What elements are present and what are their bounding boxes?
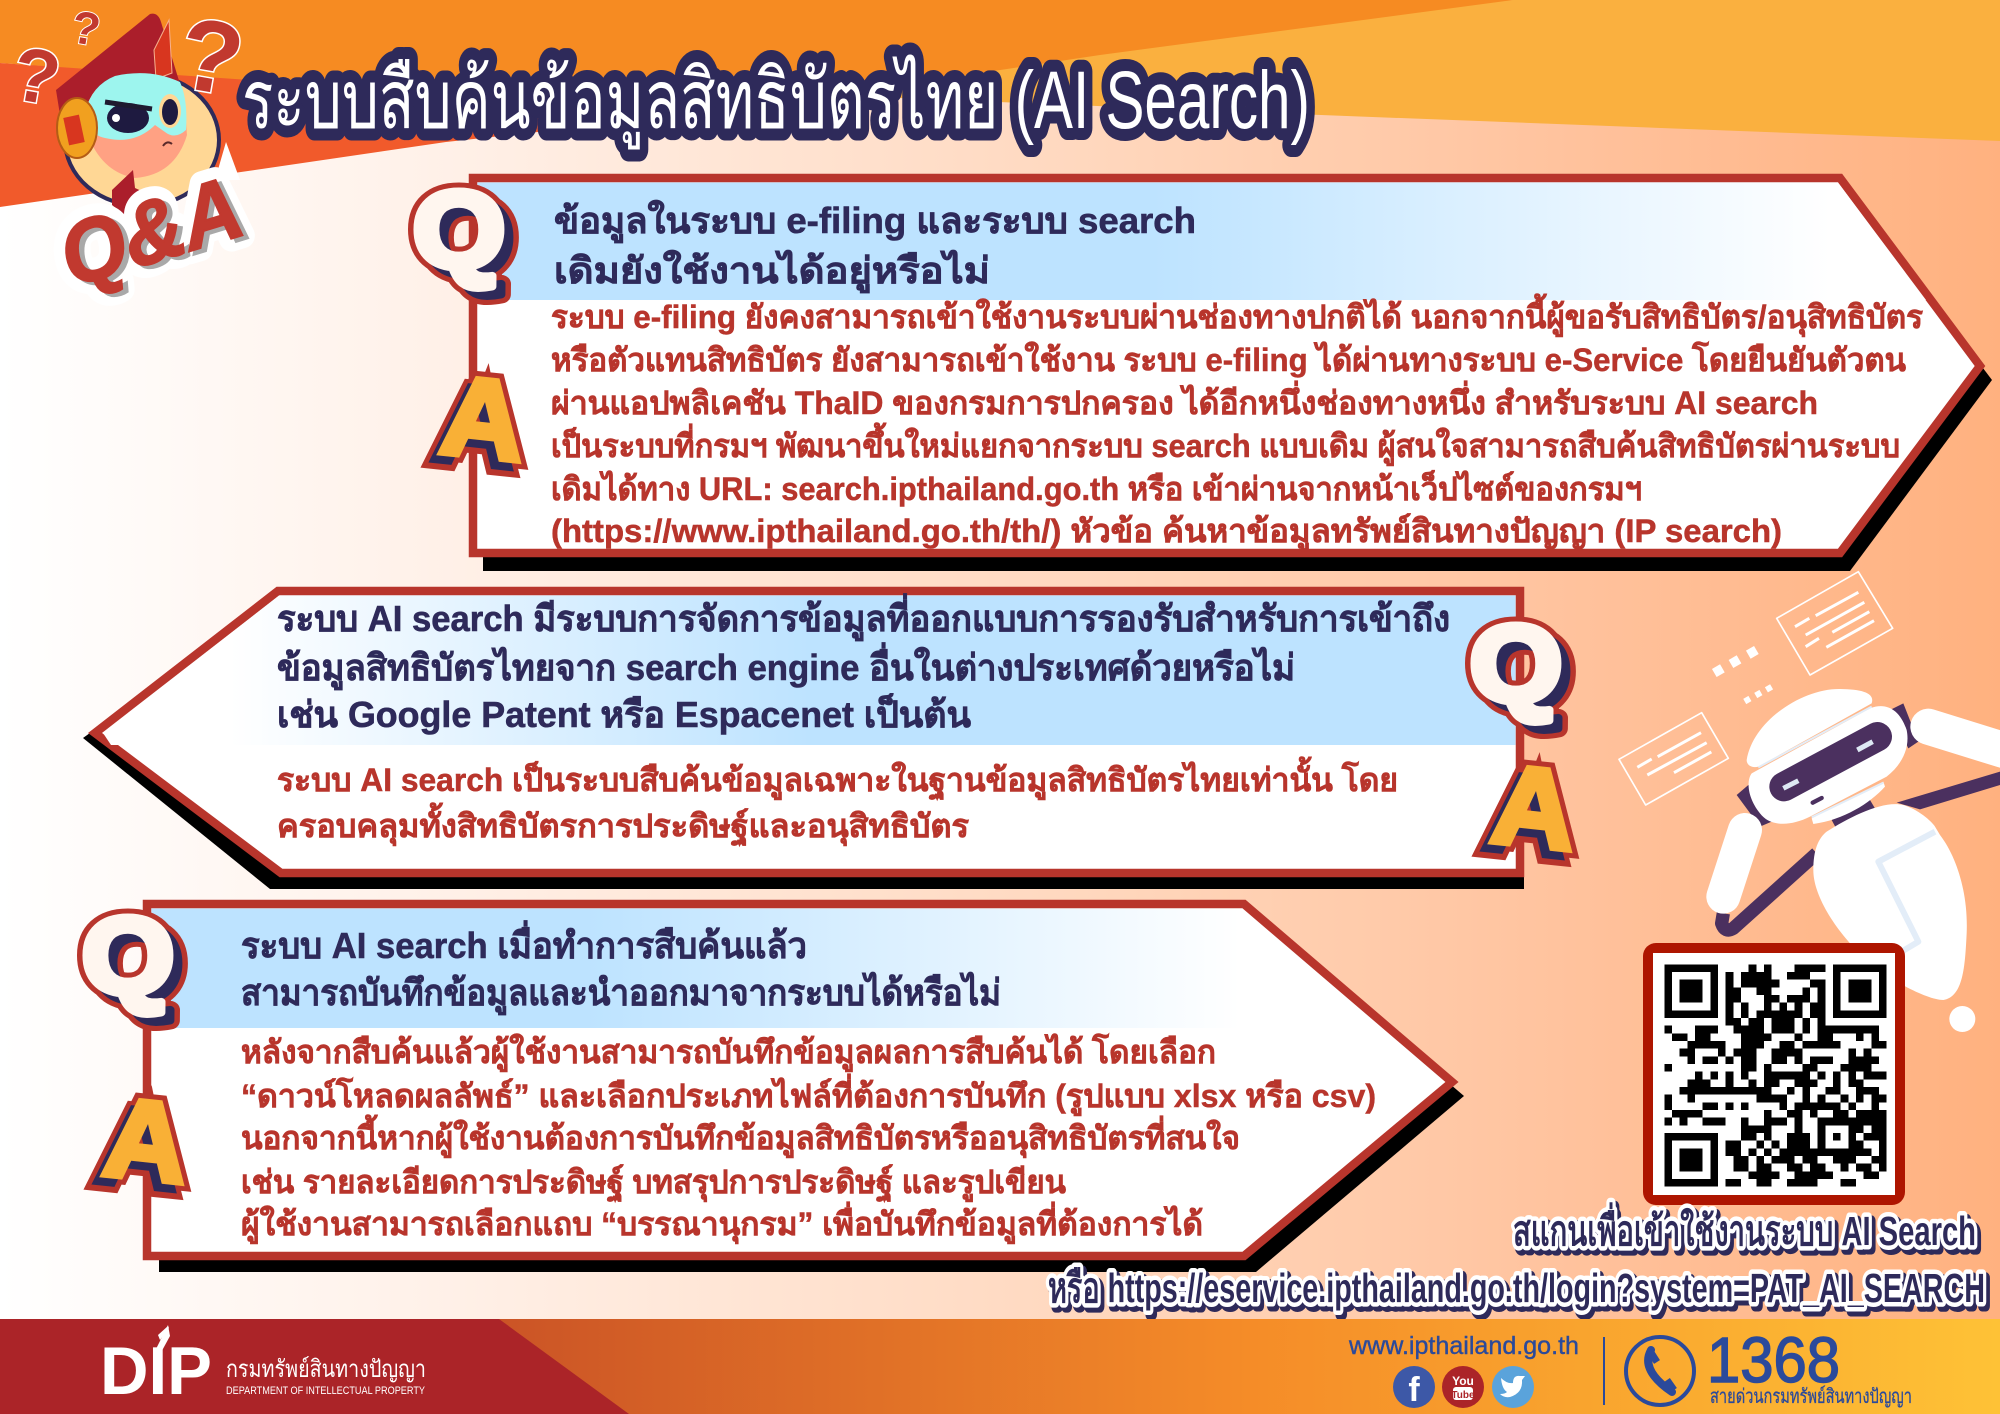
answer text: หรือตัวแทนสิทธิบัตร ยังสามารถเข้าใช้งาน ระบบ e-filing ได้ผ่านทางระบบ e-Service โดยยืนยันตัวตน	[551, 341, 1906, 378]
Q&A lettering: Q&A	[48, 157, 254, 306]
A badge: A	[1487, 741, 1582, 874]
answer text: หลังจากสืบค้นแล้วผู้ใช้งานสามารถบันทึกข้อมูลผลการสืบค้นได้ โดยเลือก	[241, 1033, 1216, 1073]
Q badge: Q	[91, 903, 183, 1024]
Q badge: Q	[413, 169, 505, 290]
question text: สามารถบันทึกข้อมูลและนำออกมาจากระบบได้หรือไม่	[241, 971, 1001, 1016]
Q badge: Q	[1470, 603, 1562, 724]
icon: phone	[1626, 1337, 1694, 1405]
footer bar	[0, 1319, 2000, 1414]
A badge: A	[1479, 749, 1574, 882]
white dot	[1949, 1006, 1975, 1032]
question band	[152, 908, 1381, 1028]
robot limbs and sticks	[1722, 703, 2000, 930]
question marks: ?	[6, 31, 67, 123]
A badge: A	[91, 1082, 186, 1215]
answer text: เป็นระบบที่กรมฯ พัฒนาขึ้นใหม่แยกจากระบบ search แบบเดิม ผู้สนใจสามารถสืบค้นสิทธิบัตรผ่านระบบ	[551, 422, 1900, 467]
mascot hat	[56, 14, 180, 115]
panel: question 1	[413, 169, 1992, 571]
robot illustration	[1619, 572, 2000, 1032]
icon: youtube: Tube	[1451, 1390, 1475, 1401]
question text: ข้อมูลในระบบ e-filing และระบบ search	[554, 199, 1196, 244]
footer red block	[0, 1319, 629, 1414]
A badge: A	[428, 359, 523, 492]
Q badge: Q	[91, 903, 183, 1024]
message card right	[1777, 572, 1893, 675]
answer text: นอกจากนี้หากผู้ใช้งานต้องการบันทึกข้อมูลสิทธิบัตรหรืออนุสิทธิบัตรที่สนใจ	[241, 1114, 1240, 1159]
answer text	[241, 1033, 1376, 1245]
answer text: ระบบ e-filing ยังคงสามารถเข้าใช้งานระบบผ่านช่องทางปกติได้ นอกจากนี้ผู้ขอรับสิทธิบัตร/อนุสิทธิบัตร	[551, 293, 1923, 338]
ear disc	[57, 98, 97, 158]
mascot with Q&A badge	[6, 0, 259, 309]
badge spike	[215, 142, 240, 180]
question text	[241, 920, 1001, 1016]
robot body	[1813, 804, 1967, 1000]
Q&A lettering: Q&A	[53, 160, 259, 308]
A badge: A	[436, 352, 531, 485]
question text: ข้อมูลสิทธิบัตรไทยจาก search engine อื่นในต่างประเทศด้วยหรือไม่	[277, 642, 1295, 691]
QR modules	[1664, 964, 1887, 1187]
question text: ระบบ AI search เมื่อทำการสืบค้นแล้ว	[241, 920, 807, 966]
Q badge: Q	[82, 895, 174, 1016]
question band	[478, 182, 1926, 300]
panel: question 3	[82, 895, 1464, 1272]
question marks	[6, 0, 252, 123]
Q badge: Q	[1470, 603, 1562, 724]
icon: facebook	[1393, 1366, 1435, 1409]
QR frame	[1643, 943, 1905, 1205]
answer text: เช่น รายละเอียดการประดิษฐ์ บทสรุปการประดิษฐ์ และรูปเขียน	[241, 1164, 1066, 1203]
title: ระบบสืบค้นข้อมูลสิทธิบัตรไทย (AI Search)	[242, 55, 1310, 149]
hat feather	[154, 20, 172, 79]
panel frame	[147, 904, 1452, 1256]
QR caption	[1048, 1202, 1988, 1315]
QR background	[1653, 953, 1895, 1195]
question text: ระบบ AI search มีระบบการจัดการข้อมูลที่ออกแบบการรองรับสำหรับการเข้าถึง	[277, 593, 1450, 642]
icon: youtube	[1442, 1366, 1484, 1408]
question text: เช่น Google Patent หรือ Espacenet เป็นต้น	[277, 692, 971, 735]
mascot tie	[112, 170, 150, 220]
robot head	[1747, 689, 1907, 824]
DIP logo: DIP	[100, 1333, 212, 1409]
question marks: ?	[68, 0, 104, 56]
answer text: เดิมได้ทาง URL: search.ipthailand.go.th หรือ เข้าผ่านจากหน้าเว็ปไซต์ของกรมฯ	[551, 469, 1642, 507]
department name	[226, 1355, 426, 1397]
A badge: A	[1487, 741, 1582, 874]
top light orange band	[600, 0, 2000, 141]
A badge: A	[428, 360, 523, 493]
A badge: A	[99, 1074, 194, 1207]
floating dots	[1712, 646, 1773, 704]
Q badge: Q	[422, 177, 514, 298]
department name: DEPARTMENT OF INTELLECTUAL PROPERTY	[226, 1385, 426, 1397]
question text	[554, 199, 1196, 294]
message card left	[1619, 713, 1728, 805]
panel: question 2	[83, 591, 1582, 889]
answer text	[551, 293, 1923, 552]
answer text	[277, 756, 1398, 847]
mascot circle	[65, 74, 219, 206]
panel shadow	[159, 918, 1464, 1272]
Q badge: Q	[422, 177, 514, 298]
mascot mask	[85, 73, 186, 140]
QR code	[1643, 943, 1905, 1205]
top orange band	[0, 0, 1513, 115]
panel shadow	[483, 192, 1992, 571]
panel frame	[95, 591, 1520, 873]
icon: twitter	[1492, 1366, 1534, 1408]
hotline label: สายด่วนกรมทรัพย์สินทางปัญญา	[1710, 1385, 1912, 1408]
top red-orange band	[0, 63, 720, 207]
mascot face	[86, 110, 187, 178]
A badge: A	[91, 1081, 186, 1214]
website: www.ipthailand.go.th	[1348, 1332, 1579, 1360]
Q&A lettering: Q&A	[48, 157, 254, 306]
A badge: A	[99, 1074, 194, 1207]
A badge: A	[436, 352, 531, 485]
answer text: (https://www.ipthailand.go.th/th/) หัวข้อ ค้นหาข้อมูลทรัพย์สินทางปัญญา (IP search)	[551, 513, 1782, 552]
answer text: ระบบ AI search เป็นระบบสืบค้นข้อมูลเฉพาะในฐานข้อมูลสิทธิบัตรไทยเท่านั้น โดย	[277, 756, 1398, 801]
Q badge: Q	[413, 169, 505, 290]
department name: กรมทรัพย์สินทางปัญญา	[226, 1355, 426, 1383]
answer text: “ดาวน์โหลดผลลัพธ์” และเลือกประเภทไฟล์ที่ต้องการบันทึก (รูปแบบ xlsx หรือ csv)	[241, 1073, 1376, 1117]
Q badge: Q	[1479, 611, 1571, 732]
icon: youtube: You	[1452, 1374, 1474, 1388]
icon: facebook: f	[1408, 1371, 1420, 1409]
Q badge: Q	[82, 895, 174, 1016]
divider	[1603, 1337, 1605, 1405]
A badge: A	[1479, 748, 1574, 881]
mascot eyes	[105, 94, 181, 146]
panel shadow	[83, 600, 1524, 889]
answer text: ครอบคลุมทั้งสิทธิบัตรการประดิษฐ์และอนุสิทธิบัตร	[277, 802, 969, 847]
question text: เดิมยังใช้งานได้อยู่หรือไม่	[554, 249, 990, 294]
Q badge: Q	[1479, 611, 1571, 732]
question band	[103, 596, 1516, 745]
panel frame	[473, 178, 1980, 553]
answer text: ผ่านแอปพลิเคชัน ThaID ของกรมการปกครอง ได้อีกหนึ่งช่องทางหนึ่ง สำหรับระบบ AI search	[551, 380, 1818, 421]
question text	[277, 593, 1450, 735]
hotline number: 1368	[1707, 1324, 1840, 1396]
answer text: ผู้ใช้งานสามารถเลือกแถบ “บรรณานุกรม” เพื่อบันทึกข้อมูลที่ต้องการได้	[241, 1201, 1203, 1245]
footer gradient	[0, 1319, 2000, 1414]
